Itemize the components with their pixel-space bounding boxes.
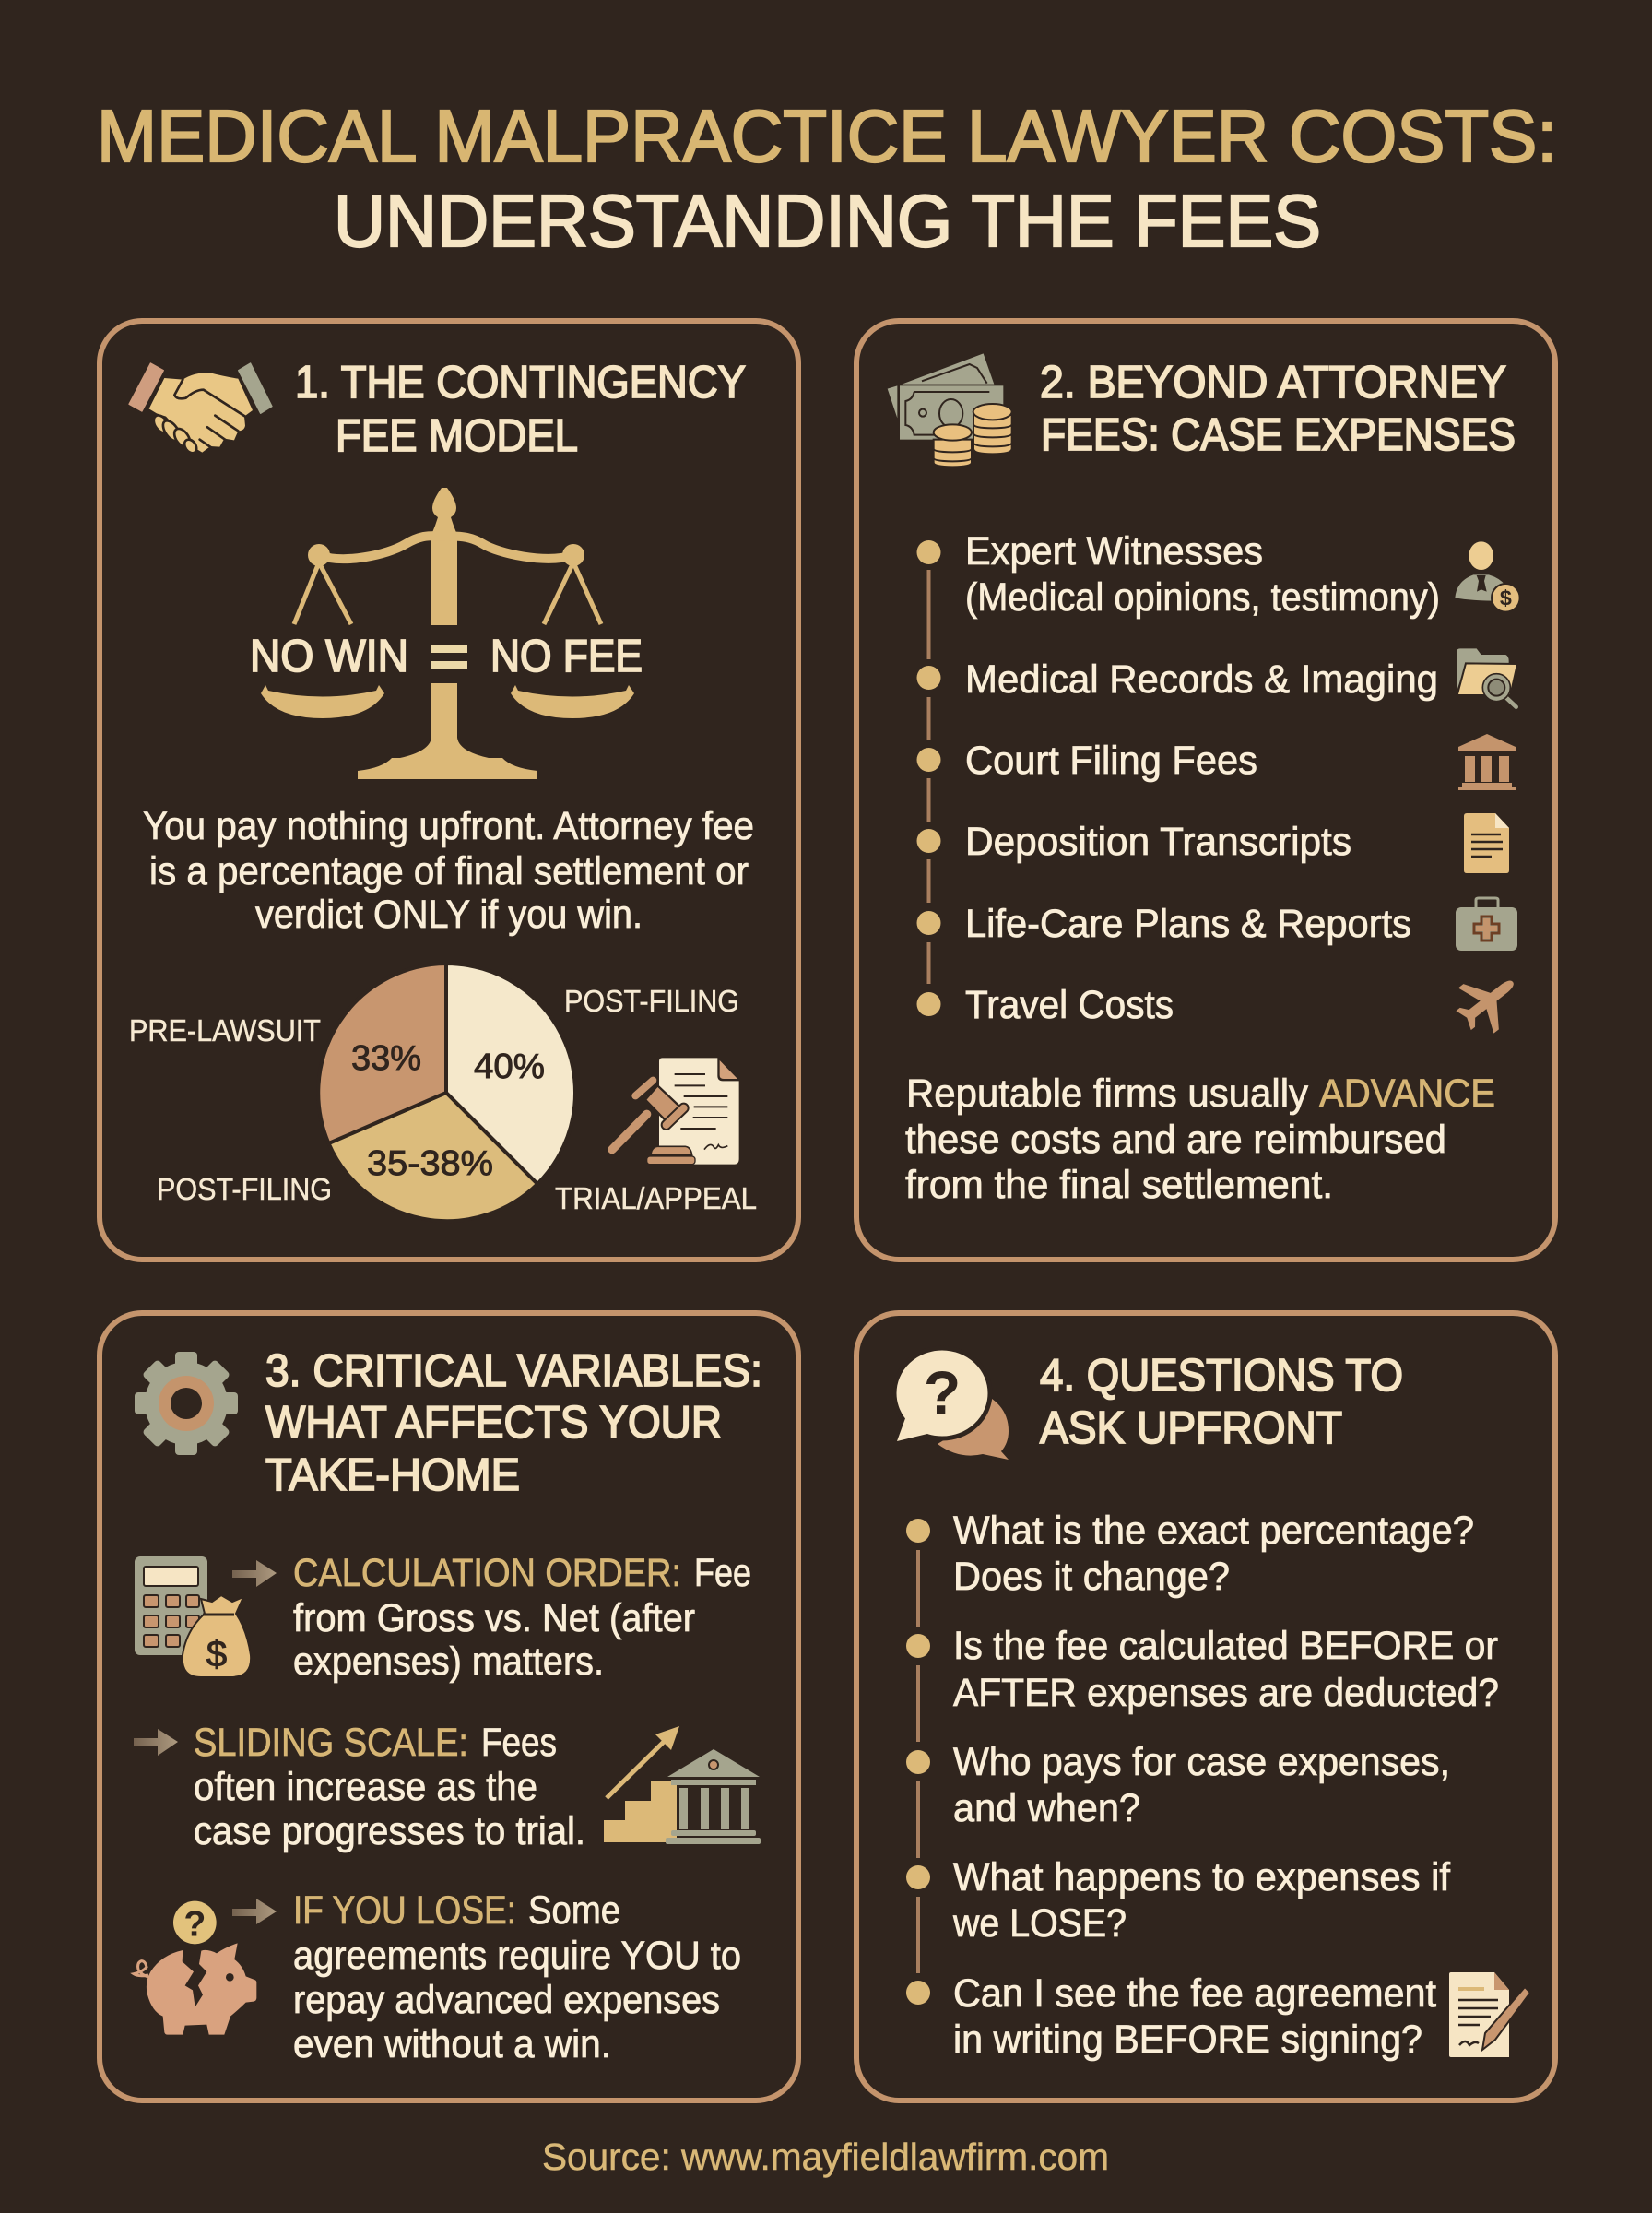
heading: 3. CRITICAL VARIABLES: xyxy=(266,1346,762,1396)
icon: handshake xyxy=(129,363,272,456)
arrow: calculation order xyxy=(232,1560,277,1587)
icon: expert witness xyxy=(1455,541,1520,612)
icon: broken piggy bank xyxy=(134,1901,256,2035)
icon: transcript document xyxy=(1464,813,1509,873)
calculation order text: expenses) matters. xyxy=(293,1639,604,1684)
expense list: Travel Costs xyxy=(965,983,1174,1027)
icon: speech bubbles xyxy=(894,1348,1009,1460)
panel: critical variables xyxy=(100,1313,798,2101)
heading: ASK UPFRONT xyxy=(1040,1403,1342,1453)
heading: 1. THE CONTINGENCY xyxy=(295,358,746,408)
icon: gear xyxy=(135,1352,238,1455)
if you lose text: agreements require YOU to xyxy=(293,1934,741,1978)
expense list: Medical Records & Imaging xyxy=(965,657,1438,702)
sliding scale text xyxy=(194,1721,585,1853)
sliding scale text: SLIDING SCALE: xyxy=(194,1721,468,1765)
no win = no fee: NO FEE xyxy=(490,632,643,681)
question list: in writing BEFORE signing? xyxy=(953,2018,1422,2062)
panel: questions to ask upfront xyxy=(856,1313,1555,2101)
heading xyxy=(1040,358,1516,460)
advance note: these costs and are reimbursed xyxy=(905,1118,1446,1162)
expense list: Court Filing Fees xyxy=(965,739,1257,783)
icon: calculator and money bag: $ xyxy=(206,1634,227,1675)
heading: WHAT AFFECTS YOUR xyxy=(266,1398,722,1448)
question list: we LOSE? xyxy=(952,1901,1127,1946)
calculation order text: Fee xyxy=(694,1551,751,1595)
description text: is a percentage of final settlement or xyxy=(149,849,749,893)
source footer: Source: www.mayfieldlawfirm.com xyxy=(542,2136,1109,2178)
heading: TAKE-HOME xyxy=(266,1450,520,1500)
question list: What happens to expenses if xyxy=(953,1855,1451,1899)
question list: Who pays for case expenses, xyxy=(953,1740,1450,1784)
description text: verdict ONLY if you win. xyxy=(255,893,643,937)
sliding scale text: Fees xyxy=(481,1721,557,1765)
icon: medical kit xyxy=(1456,898,1517,951)
heading: 4. QUESTIONS TO xyxy=(1040,1351,1403,1401)
if you lose text: Some xyxy=(528,1888,620,1933)
advance note xyxy=(905,1071,1495,1207)
pie labels: POST-FILING xyxy=(564,984,739,1018)
sliding scale text: case progresses to trial. xyxy=(194,1809,585,1853)
advance note: from the final settlement. xyxy=(905,1163,1333,1207)
question list: Does it change? xyxy=(953,1555,1230,1599)
icon: courthouse xyxy=(1458,734,1516,790)
heading: FEE MODEL xyxy=(336,411,578,461)
calculation order text: from Gross vs. Net (after xyxy=(293,1596,695,1640)
question list: AFTER expenses are deducted? xyxy=(953,1671,1499,1715)
icon: folder with magnifier xyxy=(1457,648,1517,707)
pie labels: PRE-LAWSUIT xyxy=(129,1013,321,1047)
if you lose text: repay advanced expenses xyxy=(293,1978,720,2022)
icon: broken piggy bank: ? xyxy=(183,1903,206,1944)
icon: scales of justice xyxy=(261,488,634,779)
if you lose text: even without a win. xyxy=(293,2022,611,2066)
panel: the contingency fee model xyxy=(100,321,798,1260)
timeline xyxy=(916,540,940,1016)
pie chart: 40% xyxy=(474,1047,545,1086)
sliding scale text: often increase as the xyxy=(194,1765,537,1809)
description text: You pay nothing upfront. Attorney fee xyxy=(143,804,754,848)
arrow: if you lose xyxy=(232,1899,277,1924)
expense list: Life-Care Plans & Reports xyxy=(965,902,1411,946)
question list xyxy=(952,1509,1499,2062)
if you lose text: IF YOU LOSE: xyxy=(293,1888,516,1933)
advance note: Reputable firms usually xyxy=(906,1071,1308,1116)
question list: and when? xyxy=(953,1786,1140,1830)
timeline xyxy=(906,1519,930,2005)
if you lose text xyxy=(293,1888,741,2066)
calculation order text xyxy=(293,1551,751,1684)
icon: stairs, arrow and courthouse xyxy=(604,1726,761,1844)
pie labels xyxy=(129,984,757,1215)
heading xyxy=(1040,1351,1403,1453)
icon: expert witness: $ xyxy=(1500,586,1512,610)
expense list: (Medical opinions, testimony) xyxy=(965,575,1440,620)
pie chart: 35-38% xyxy=(367,1144,493,1183)
description text xyxy=(143,804,754,937)
icon: money and coins xyxy=(888,353,1012,467)
heading xyxy=(295,358,746,461)
advance note: ADVANCE xyxy=(1319,1071,1495,1116)
arrow: sliding scale xyxy=(134,1729,178,1756)
heading: 2. BEYOND ATTORNEY xyxy=(1040,358,1506,408)
icon: gavel and document xyxy=(612,1058,739,1165)
no win = no fee: NO WIN xyxy=(250,632,408,681)
no win = no fee xyxy=(250,632,643,681)
title: UNDERSTANDING THE FEES xyxy=(334,180,1321,262)
calculation order text: CALCULATION ORDER: xyxy=(293,1551,681,1595)
question list: What is the exact percentage? xyxy=(953,1509,1474,1553)
panel: case expenses xyxy=(856,321,1555,1260)
icon: agreement and pen xyxy=(1449,1972,1530,2057)
icon: airplane xyxy=(1446,959,1530,1043)
pie labels: POST-FILING xyxy=(157,1172,332,1206)
expense list xyxy=(965,529,1440,1027)
icon: speech bubbles: ? xyxy=(924,1358,961,1426)
expense list: Deposition Transcripts xyxy=(965,820,1351,864)
title: MEDICAL MALPRACTICE LAWYER COSTS: xyxy=(97,95,1557,177)
heading xyxy=(266,1346,762,1500)
pie chart: 33% xyxy=(351,1039,421,1078)
expense list: Expert Witnesses xyxy=(965,529,1263,574)
title xyxy=(97,95,1557,262)
question list: Can I see the fee agreement xyxy=(953,1971,1436,2016)
question list: Is the fee calculated BEFORE or xyxy=(953,1624,1498,1668)
icon: calculator and money bag xyxy=(135,1556,251,1677)
pie chart xyxy=(318,964,575,1221)
heading: FEES: CASE EXPENSES xyxy=(1041,410,1516,460)
pie labels: TRIAL/APPEAL xyxy=(555,1181,757,1215)
